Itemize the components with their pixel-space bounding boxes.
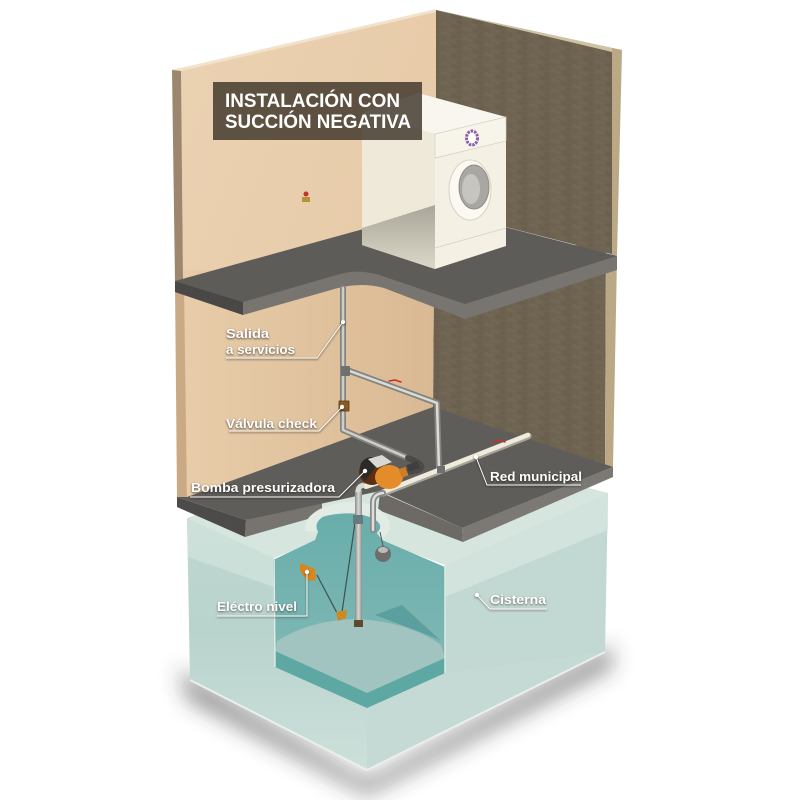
electro level float lower: [336, 610, 347, 621]
cistern left face: [187, 518, 367, 770]
label: cisterna: Cisterna: [490, 593, 547, 607]
label: salida a servicios: Salida: [226, 327, 270, 341]
connector: [406, 461, 420, 472]
washer base line: [435, 228, 506, 248]
title line 2: SUCCIÓN NEGATIVA: [225, 111, 411, 133]
control panel: [435, 117, 506, 158]
upper floor slab: [175, 209, 617, 319]
municipal pipe: [383, 435, 528, 493]
branch valve handle: [389, 380, 401, 382]
label: salida a servicios: [226, 320, 345, 358]
label: bomba presurizadora: Bomba presurizadora: [191, 481, 336, 495]
tee fitting: [341, 366, 350, 376]
motor: [359, 459, 385, 485]
upper beige wall: [172, 9, 436, 281]
float ball: [375, 532, 391, 562]
dark wall fold: [375, 605, 440, 640]
purple dial: [466, 131, 478, 145]
control box: [368, 455, 392, 468]
slab front left: [245, 500, 322, 537]
door glass: [459, 165, 489, 209]
washing machine: [362, 93, 506, 269]
label: salida a servicios: a servicios: [226, 343, 295, 357]
lower beige wall: [175, 270, 434, 497]
lower floor slab: [177, 407, 613, 542]
cavity front water strip: [275, 651, 445, 708]
volute: [375, 465, 403, 489]
pump discharge elbow: [403, 458, 421, 473]
water cavity: [273, 513, 445, 708]
title box: [213, 82, 422, 140]
suction pipe: [353, 485, 364, 627]
manhole ring: [305, 502, 390, 538]
washer side: [362, 113, 435, 269]
motor end: [360, 457, 380, 481]
cistern right face: [367, 493, 608, 770]
electro level float upper: [300, 563, 316, 581]
pipes: [339, 288, 528, 530]
label: valvula check: [226, 405, 344, 431]
washer side floor reflection: [362, 205, 435, 269]
cistern right light band: [445, 493, 608, 597]
cistern: [187, 470, 608, 770]
inner wall edge: [274, 558, 275, 667]
label: cisterna: [475, 593, 547, 609]
float wires: [317, 523, 355, 613]
cistern left light band: [187, 518, 274, 587]
cistern edge light: [190, 652, 605, 770]
check valve: [339, 401, 349, 411]
wall tap: [302, 192, 310, 202]
washer front: [435, 117, 506, 269]
slab left side: [177, 497, 246, 537]
slab top: [177, 407, 613, 528]
riser pipe: [343, 288, 408, 458]
cavity floor: [275, 619, 445, 693]
label: red municipal: [474, 455, 582, 485]
title line 1: INSTALACIÓN CON: [225, 90, 400, 112]
pump: [359, 455, 420, 489]
lower right brick wall: [433, 240, 617, 468]
slab front right: [378, 492, 463, 542]
pipe clamp: [437, 466, 445, 473]
label: valvula check: Válvula check: [226, 417, 317, 431]
cistern front corner: [367, 652, 605, 770]
municipal valve handle: [493, 440, 505, 443]
label: red municipal: Red municipal: [490, 470, 582, 484]
label: electro nivel: [217, 570, 309, 616]
branch pipe: [347, 370, 439, 470]
suction stub: [366, 482, 378, 486]
washer top: [362, 93, 506, 134]
cistern shadow: [178, 645, 612, 795]
foot valve: [354, 620, 363, 627]
label: electro nivel: Eléctro nivel: [217, 600, 297, 614]
discharge: [399, 467, 408, 478]
upper right brick wall: [436, 10, 622, 256]
cistern top face: [187, 470, 608, 565]
inlet elbow and drop: [373, 493, 383, 530]
washer door: [449, 160, 491, 220]
label: bomba presurizadora: [190, 469, 367, 497]
